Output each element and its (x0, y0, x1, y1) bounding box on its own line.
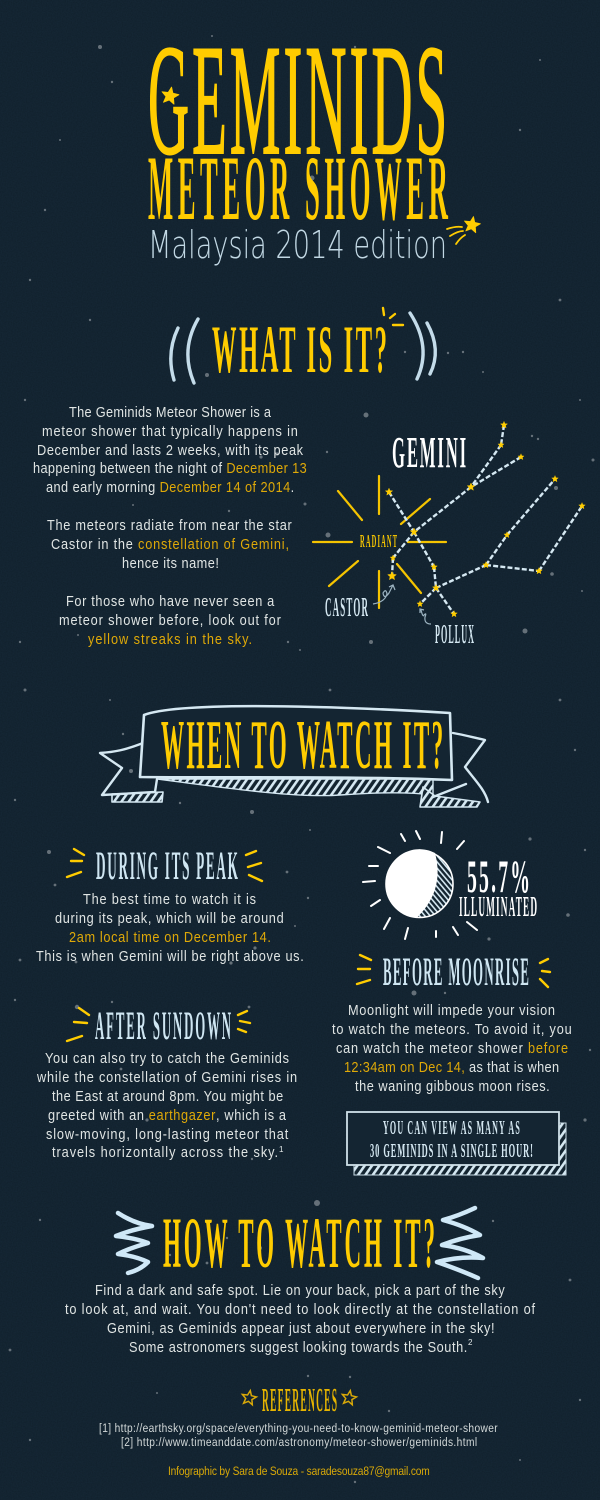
label: Castor: CASTOR (325, 593, 368, 623)
arrow: to Pollux (420, 609, 431, 624)
credit line: Infographic by Sara de Souza - saradesouza87@gmail.com (168, 1465, 430, 1478)
text block: can watch the meteor shower before (336, 1039, 568, 1056)
text block: what is it (33, 403, 307, 647)
text block: This is when Gemini will be right above us. (36, 947, 304, 964)
heading: References: REFERENCES (262, 1382, 337, 1419)
text block: what is it: For those who have never seen a (66, 592, 274, 609)
text block: to look at, and wait. You don't need to look directly at the constellation of (65, 1300, 535, 1317)
text block: Some astronomers suggest looking towards the South. (129, 1338, 467, 1355)
text block: what is it: meteor shower that typically happens in (42, 422, 298, 439)
constellation lines (389, 425, 582, 614)
icon: heading sparks (67, 849, 262, 881)
section: how to watch it (65, 1202, 535, 1355)
text block: what is it: The Geminids Meteor Shower is a (69, 403, 271, 420)
arrow: to Castor (373, 585, 395, 604)
text block: what is it: Castor in the constellation of Gemini, (51, 535, 289, 552)
text block: 12:34am on Dec 14, as that is when (344, 1058, 559, 1075)
text block: 2am local time on December 14. (69, 928, 271, 945)
callout: 30 geminids per hour: YOU CAN VIEW AS MANY AS (383, 1117, 520, 1139)
icon: right scribble (437, 1208, 483, 1278)
heading: What is it?: WHAT IS IT? (212, 312, 387, 388)
icon: shooting star (447, 215, 481, 244)
text block: what is it: hence its name! (122, 554, 219, 571)
text block: what is it: happening between the night of December 13 (33, 459, 307, 476)
text block: the waning gibbous moon rises. (355, 1077, 550, 1094)
callout: 30 geminids per hour: 30 GEMINIDS IN A SINGLE HOUR! (370, 1140, 533, 1162)
reference links (99, 1422, 498, 1449)
text block: greeted with an earthgazer, which is a (48, 1106, 286, 1123)
text block: to watch the meteors. To avoid it, you (332, 1020, 572, 1037)
text block: what is it: The meteors radiate from near the star (47, 516, 292, 533)
label: Gemini: GEMINI (392, 429, 466, 478)
label: Pollux: POLLUX (435, 620, 474, 650)
text block: while the constellation of Gemini rises in (36, 1068, 297, 1085)
ribbon tails and folds (100, 733, 488, 807)
label: Radiant: RADIANT (360, 531, 397, 551)
icon: left scribble (116, 1213, 152, 1273)
icon: right star (341, 1389, 357, 1405)
subtitle: Malaysia 2014 edition: Malaysia 2014 edition (148, 223, 447, 267)
stat: 55.7%: 55.7% (467, 850, 530, 902)
section: before moonrise (332, 951, 572, 1094)
moon phase (363, 831, 537, 939)
text block: the East at around 8pm. You might be (52, 1087, 283, 1104)
text block: what is it: meteor shower before, look out for (59, 611, 281, 628)
text block: what is it: and early morning December 14 of 2014. (46, 478, 294, 495)
title: Geminids: GEMINIDS (148, 12, 447, 188)
reference links: [1] http://earthsky.org/space/everything-you-need-to-know-geminid-meteor-shower (99, 1422, 498, 1435)
constellation stars (385, 421, 585, 617)
icon: heading sparks (67, 1008, 250, 1041)
text block (36, 890, 304, 964)
icon: question mark sparks (383, 308, 403, 325)
heading: Before moonrise: BEFORE MOONRISE (383, 951, 529, 994)
section: references (99, 1382, 498, 1478)
icon: star on G (160, 86, 180, 105)
icon: moon (386, 849, 453, 918)
radiant rays (313, 476, 446, 608)
text block: slow-moving, long-lasting meteor that (46, 1125, 288, 1142)
text block (65, 1281, 535, 1355)
heading: What is it? (171, 308, 435, 388)
text block: Moonlight will impede your vision (348, 1001, 555, 1018)
chart: Gemini constellation (313, 421, 585, 650)
text block: 2 (468, 1338, 473, 1347)
text block: The best time to watch it is (83, 890, 256, 907)
heading: During its peak: DURING ITS PEAK (96, 844, 238, 888)
text block (36, 1049, 297, 1160)
icon: left star (241, 1389, 257, 1405)
text block: You can also try to catch the Geminids (45, 1049, 289, 1066)
icon: heading sparks (357, 955, 550, 987)
text block: Gemini, as Geminids appear just about everywhere in the sky! (107, 1319, 495, 1336)
section: during its peak (36, 844, 304, 964)
title: Meteor Shower: METEOR SHOWER (148, 138, 448, 239)
text block: during its peak, which will be around (55, 909, 284, 926)
callout: 30 geminids per hour (347, 1112, 566, 1175)
heading: How to watch it?: HOW TO WATCH IT? (163, 1202, 435, 1283)
icon: right brackets (410, 313, 435, 379)
banner heading text: WHEN TO WATCH IT? (161, 708, 443, 784)
heading: After sundown: AFTER SUNDOWN (95, 1005, 231, 1048)
title block (148, 12, 481, 267)
reference links: [2] http://www.timeanddate.com/astronomy/meteor-shower/geminids.html (121, 1436, 477, 1449)
icon: moon rays (363, 831, 477, 939)
banner: When to watch it? (100, 706, 488, 807)
icon: left brackets (171, 319, 198, 383)
label: illuminated: ILLUMINATED (459, 890, 537, 923)
text block: what is it: December and lasts 2 weeks, with its peak (37, 441, 303, 458)
text block: Find a dark and safe spot. Lie on your back, pick a part of the sky (95, 1281, 505, 1298)
text block: what is it: yellow streaks in the sky. (88, 630, 252, 647)
ribbon front panel (140, 706, 452, 780)
section: after sundown (36, 1005, 297, 1160)
text block: 1 (279, 1145, 284, 1154)
text block: travels horizontally across the sky. (52, 1143, 278, 1160)
text block (332, 1001, 572, 1094)
